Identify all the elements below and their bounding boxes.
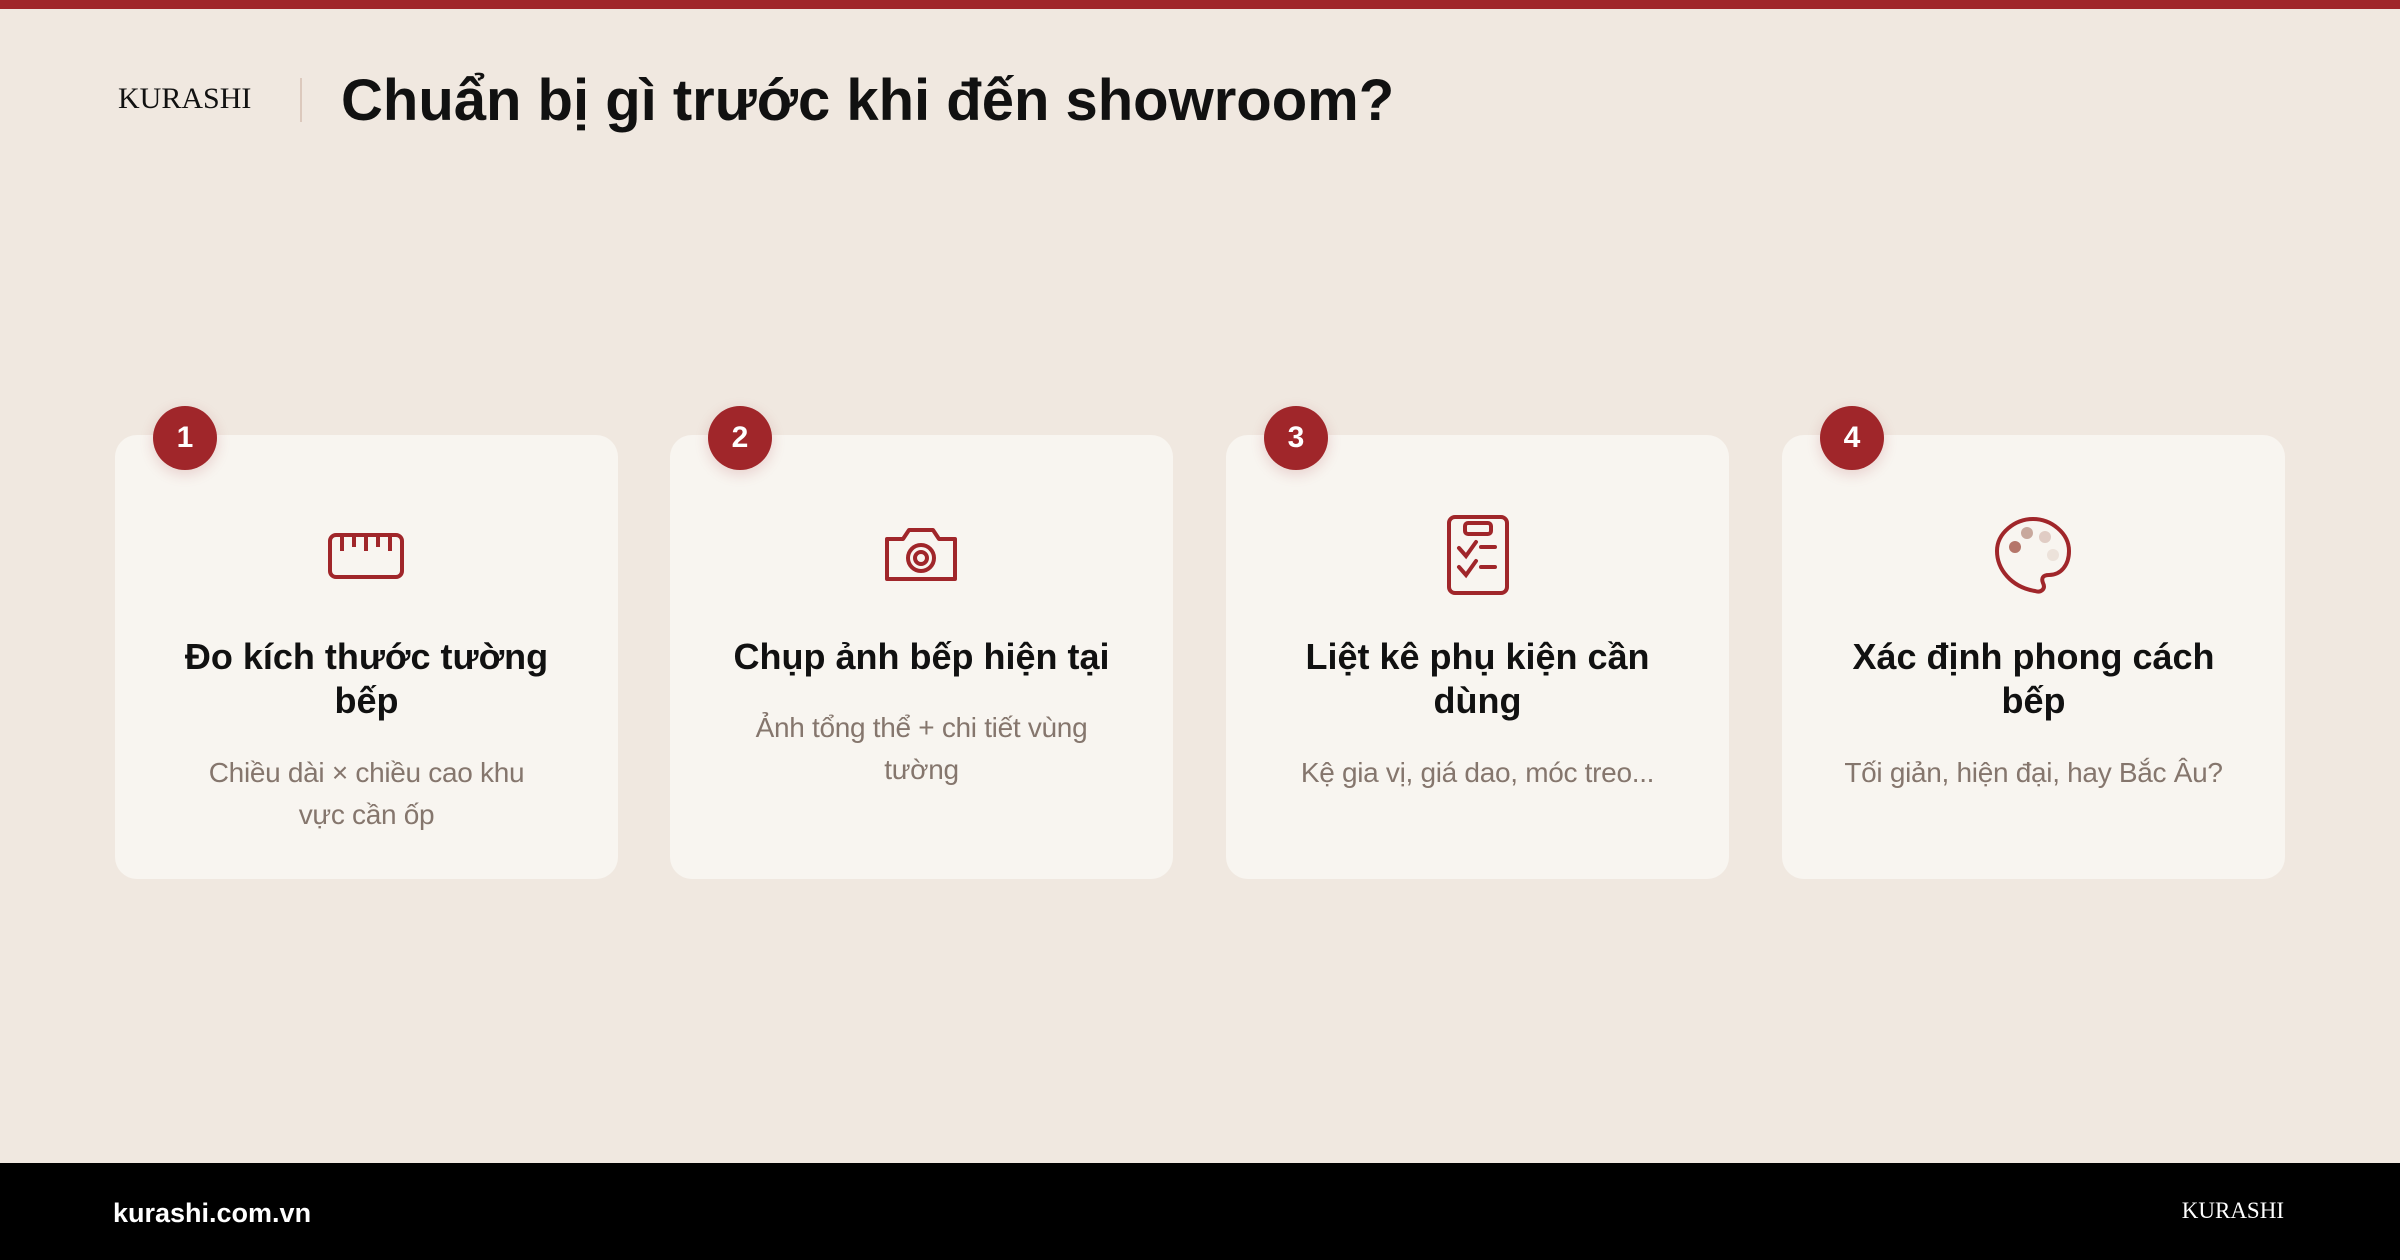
badge 1 (153, 406, 217, 470)
icon: ruler (328, 533, 404, 579)
footer logo: KURASHI (2182, 1198, 2284, 1223)
badge 1: 1 (177, 421, 193, 454)
panel: card 2 (670, 435, 1173, 879)
badge 3 (1264, 406, 1328, 470)
card description: Tối giản, hiện đại, hay Bắc Âu? (1844, 757, 2223, 788)
logo: KURASHI (118, 82, 251, 115)
badge 4: 4 (1844, 421, 1860, 454)
badge 2 (708, 406, 772, 470)
badge 2: 2 (732, 421, 748, 454)
icon: checklist (1447, 515, 1509, 595)
footer url: kurashi.com.vn (113, 1198, 311, 1228)
panel: card 4 (1782, 435, 2285, 879)
card description: Chiều dài × chiều cao khu vực cần ốp (209, 757, 524, 830)
card description: Kệ gia vị, giá dao, móc treo... (1301, 757, 1654, 788)
card title: Chụp ảnh bếp hiện tại (734, 636, 1110, 677)
title: Chuẩn bị gì trước khi đến showroom? (341, 68, 1394, 133)
badge 4 (1820, 406, 1884, 470)
card description: Ảnh tổng thể + chi tiết vùng tường (756, 712, 1087, 785)
card title: Đo kích thước tường bếp (185, 636, 548, 721)
icon: camera (885, 528, 957, 581)
card title: Liệt kê phụ kiện cần dùng (1305, 636, 1650, 721)
card title: Xác định phong cách bếp (1852, 636, 2215, 721)
footer (0, 1163, 2400, 1260)
icon: palette (1995, 517, 2071, 594)
badge 3: 3 (1288, 421, 1304, 454)
panel: card 1 (115, 435, 618, 879)
panel: card 3 (1226, 435, 1729, 879)
